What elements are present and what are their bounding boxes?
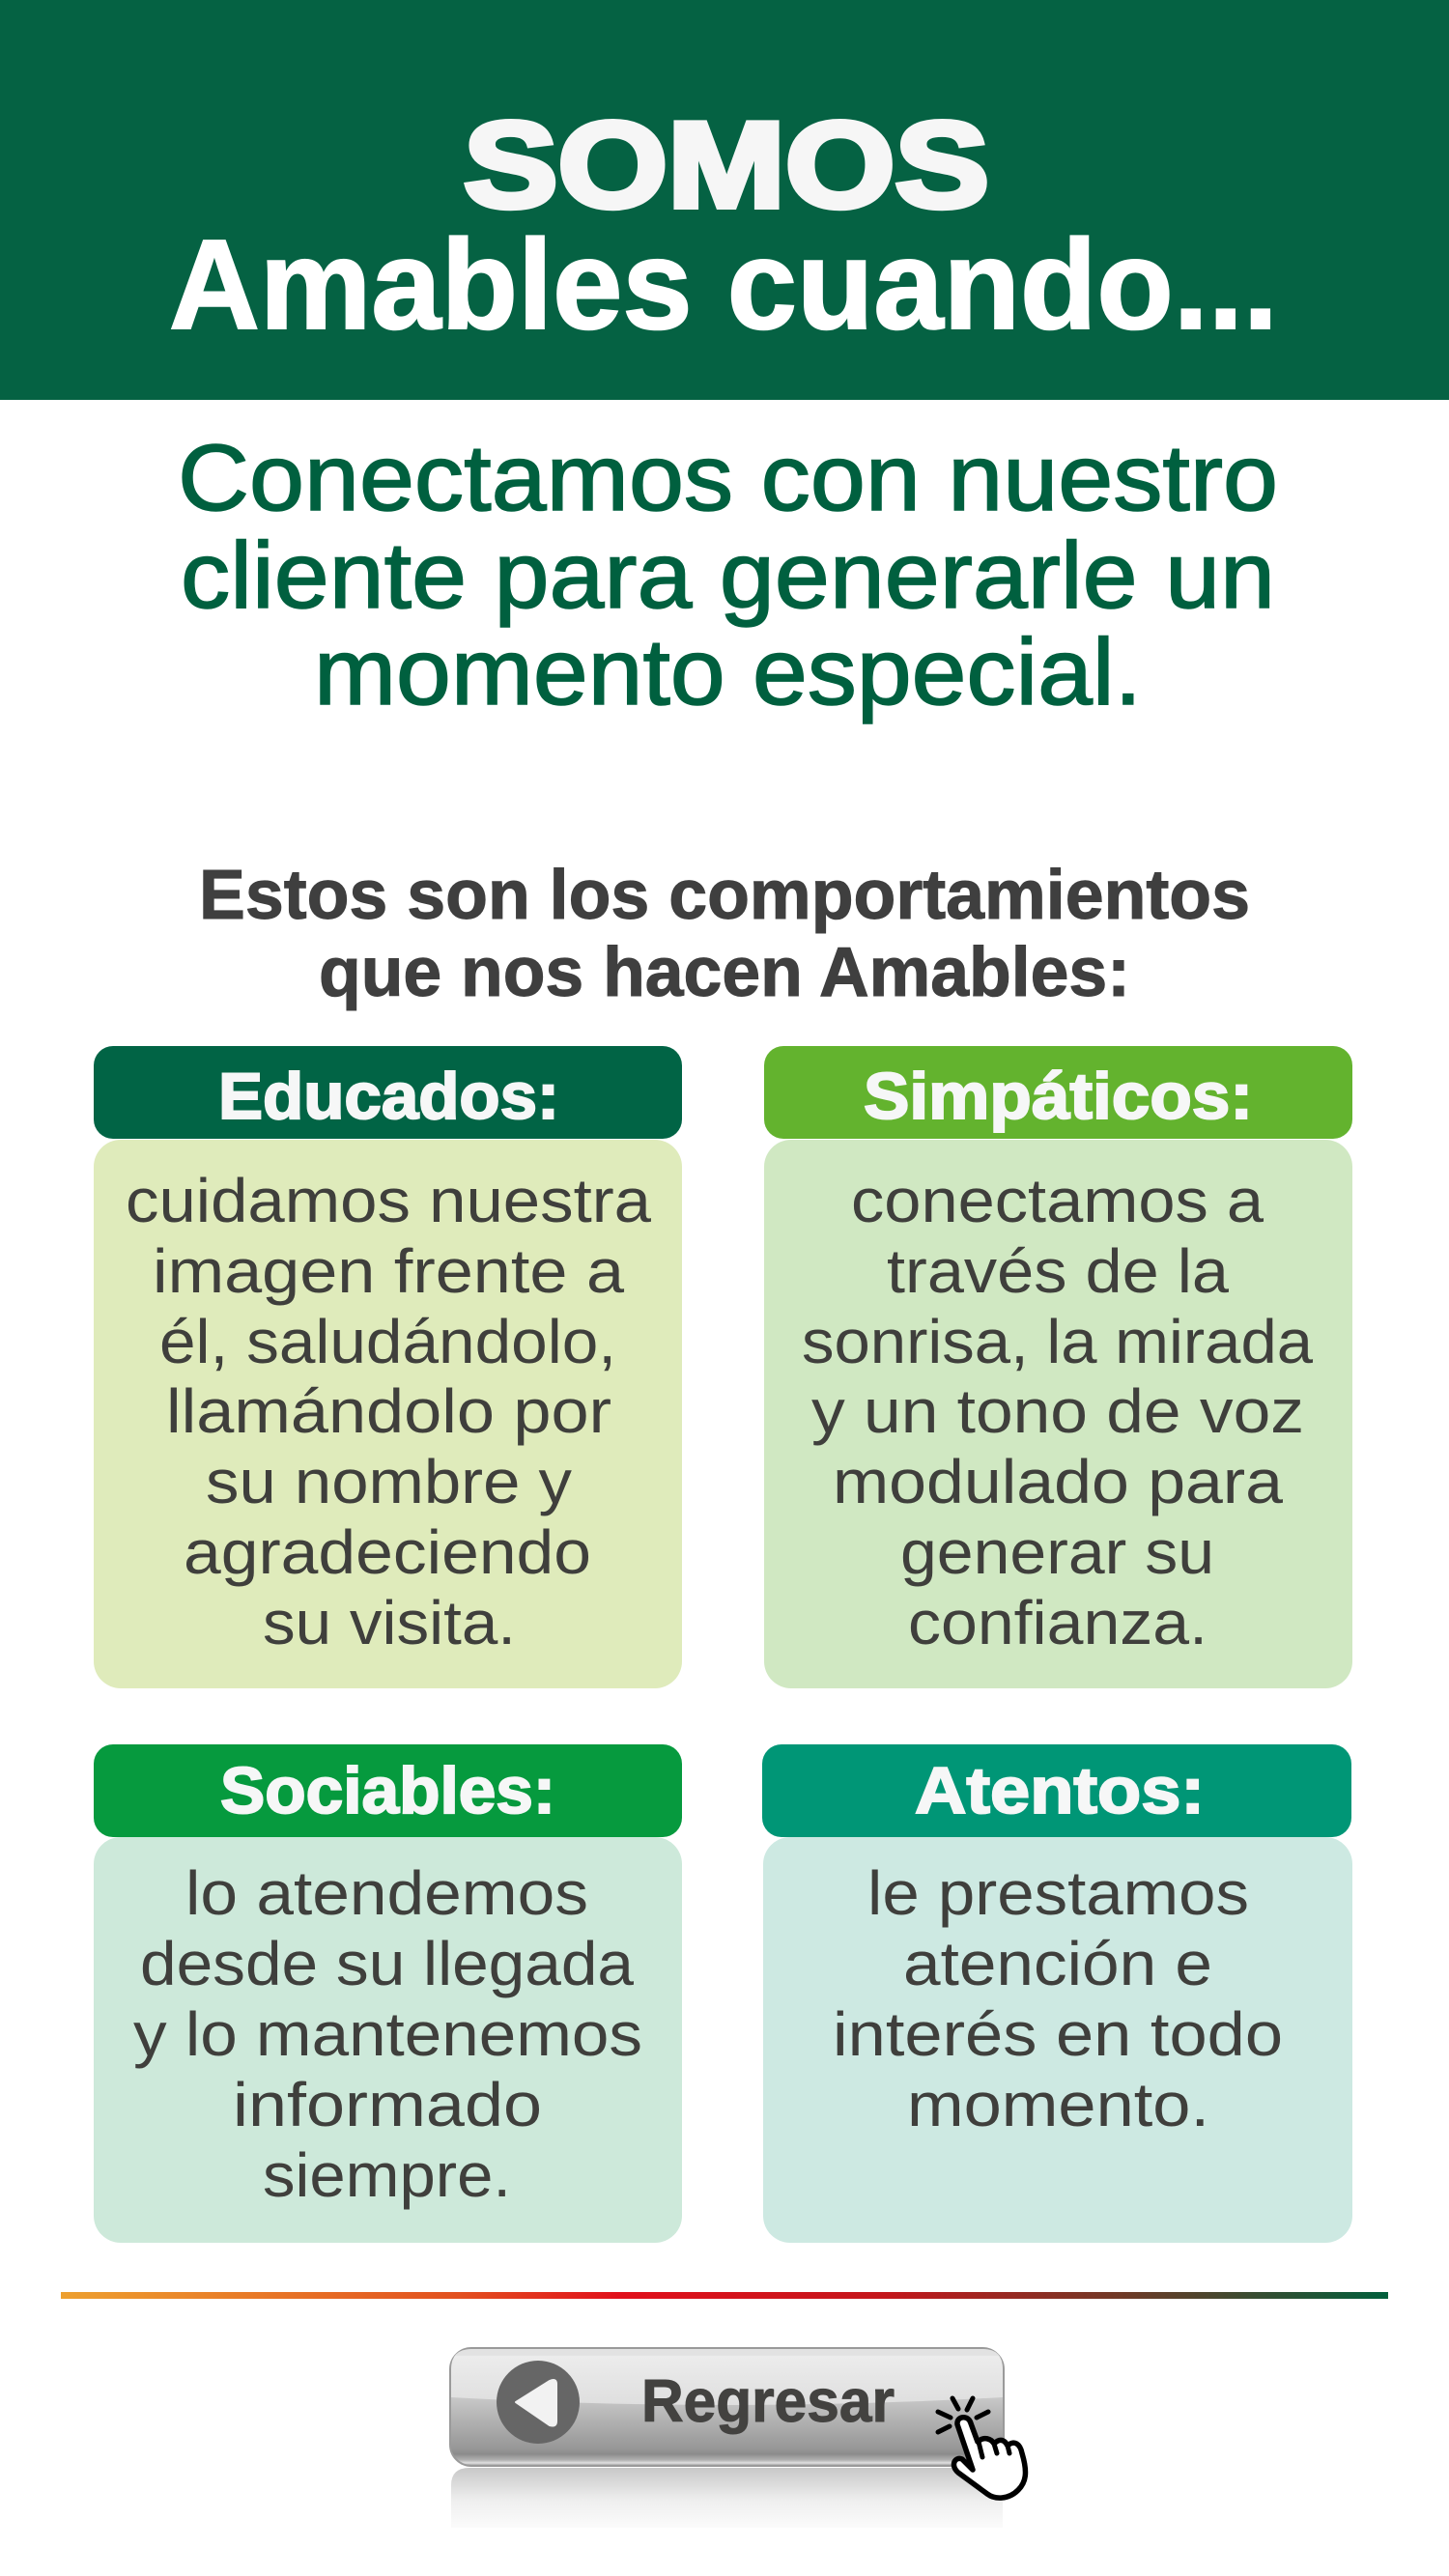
text: Simpáticos description: confianza. bbox=[908, 1588, 1208, 1657]
panel: Sociables bbox=[94, 1744, 682, 2243]
text: Simpáticos description: modulado para bbox=[833, 1447, 1283, 1516]
button body bbox=[450, 2348, 1004, 2466]
subtitle: momento especial. bbox=[314, 619, 1142, 724]
panel: Simpáticos bbox=[764, 1046, 1352, 1688]
icon: pointing hand bbox=[938, 2398, 1025, 2498]
title: SOMOS: SOMOS bbox=[464, 97, 989, 233]
label: Simpáticos: Simpáticos: bbox=[864, 1060, 1253, 1133]
panel: Atentos bbox=[762, 1744, 1352, 2243]
button gloss bbox=[451, 2349, 1003, 2405]
title: Amables cuando: Amables cuando... bbox=[169, 213, 1278, 355]
text: Simpáticos description bbox=[802, 1166, 1313, 1657]
panel: Educados bbox=[94, 1046, 682, 1688]
text: Simpáticos description: conectamos a bbox=[851, 1166, 1264, 1235]
text: Sociables description: y lo mantenemos bbox=[133, 1999, 642, 2069]
text: Atentos description: le prestamos bbox=[867, 1858, 1249, 1928]
text: Educados description: su nombre y bbox=[206, 1447, 572, 1516]
button label: Regresar bbox=[641, 2368, 895, 2435]
subtitle: cliente para generarle un bbox=[181, 523, 1275, 628]
text: Educados description: llamándolo por bbox=[166, 1376, 611, 1446]
button reflection bbox=[451, 2468, 1003, 2528]
text: Educados description: él, saludándolo, bbox=[159, 1307, 616, 1376]
text: Educados description bbox=[126, 1166, 651, 1657]
section heading: que nos hacen Amables: bbox=[319, 934, 1130, 1011]
text: Simpáticos description: través de la bbox=[887, 1236, 1229, 1306]
text: Simpáticos description: sonrisa, la mirada bbox=[802, 1307, 1313, 1376]
text: Atentos description: momento. bbox=[907, 2070, 1209, 2139]
text: Atentos description: atención e bbox=[903, 1929, 1212, 1998]
text: Sociables description: siempre. bbox=[263, 2140, 511, 2210]
header banner bbox=[0, 0, 1449, 400]
label: Sociables: Sociables: bbox=[220, 1754, 555, 1827]
text: Sociables description bbox=[133, 1858, 642, 2210]
text: Sociables description: informado bbox=[233, 2070, 542, 2139]
text: Atentos description bbox=[833, 1858, 1283, 2139]
text: Atentos description: interés en todo bbox=[833, 1999, 1283, 2069]
text: Simpáticos description: y un tono de voz bbox=[811, 1376, 1304, 1446]
text: Sociables description: lo atendemos bbox=[185, 1858, 588, 1928]
subtitle: Conectamos con nuestro bbox=[178, 425, 1278, 530]
text: Educados description: imagen frente a bbox=[153, 1236, 624, 1306]
label: Educados: Educados: bbox=[218, 1060, 559, 1133]
section heading: Estos son los comportamientos bbox=[199, 857, 1250, 934]
text: Educados description: cuidamos nuestra bbox=[126, 1166, 651, 1235]
section heading bbox=[199, 857, 1250, 1011]
text: Educados description: agradeciendo bbox=[184, 1517, 591, 1587]
text: Simpáticos description: generar su bbox=[900, 1517, 1214, 1587]
subtitle bbox=[178, 425, 1278, 724]
icon: back arrow bbox=[497, 2361, 580, 2444]
label: Atentos: Atentos: bbox=[915, 1754, 1205, 1827]
button: Regresar bbox=[450, 2348, 1025, 2528]
text: Educados description: su visita. bbox=[263, 1588, 516, 1657]
text: Sociables description: desde su llegada bbox=[140, 1929, 634, 1998]
